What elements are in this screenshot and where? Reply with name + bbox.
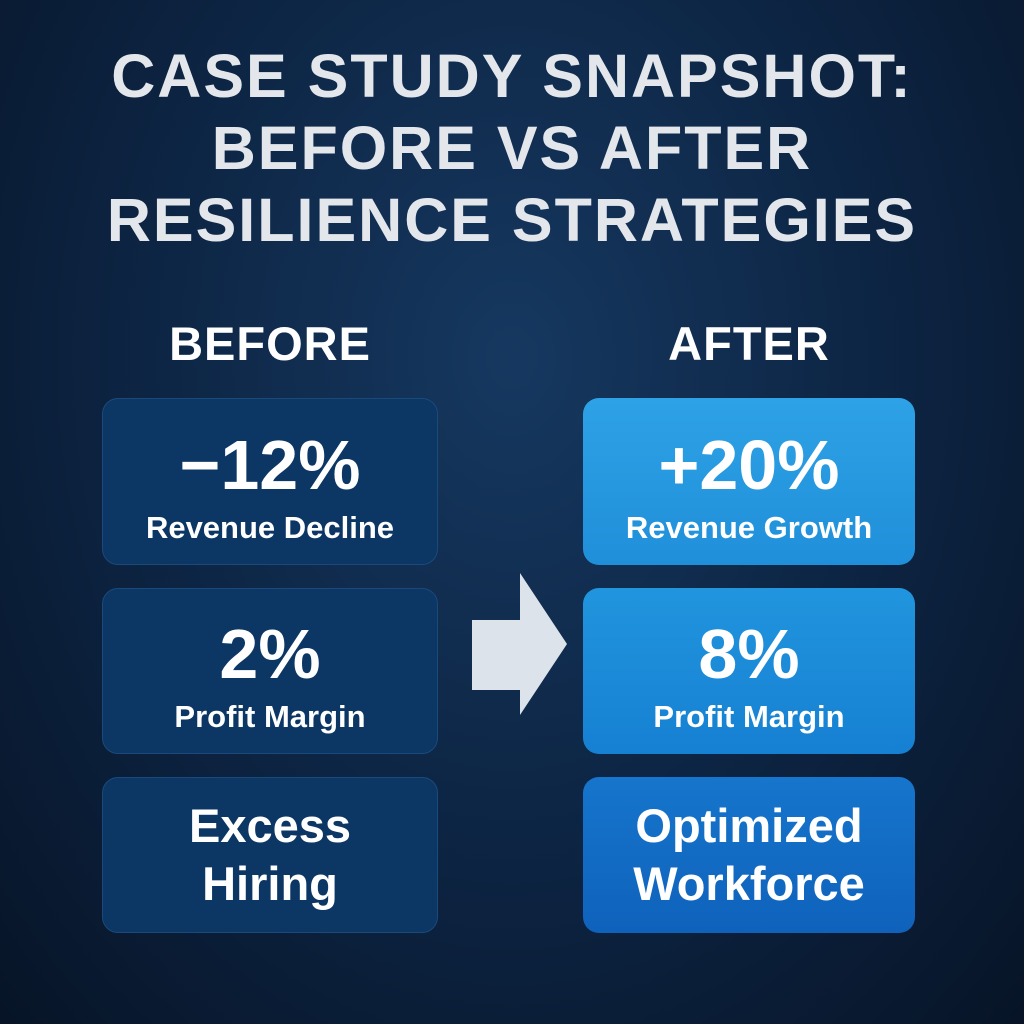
panel: before revenue: −12%: [180, 426, 360, 504]
panel: after workforce: Optimized: [635, 799, 863, 852]
panel: before profit: [102, 588, 438, 754]
panel: before profit: Profit Margin: [174, 699, 366, 734]
panel: after profit: 8%: [698, 615, 800, 693]
panel: before revenue: Revenue Decline: [146, 510, 394, 544]
panel: before profit: 2%: [219, 615, 321, 693]
title: BEFORE VS AFTER: [212, 114, 812, 182]
panel: after revenue: Revenue Growth: [626, 510, 872, 544]
panel: after revenue: +20%: [658, 426, 839, 504]
title: [107, 42, 917, 254]
panel: before hiring: Excess: [189, 799, 351, 852]
heading: before: BEFORE: [169, 317, 371, 370]
arrow: [472, 573, 567, 715]
panel: after revenue: [583, 398, 915, 565]
panel: before hiring: [102, 777, 438, 933]
panel: before revenue: [102, 398, 438, 565]
title: RESILIENCE STRATEGIES: [107, 186, 917, 254]
heading: after: AFTER: [668, 317, 830, 370]
panel: after profit: [583, 588, 915, 754]
panel: before hiring: Hiring: [202, 857, 338, 910]
title: CASE STUDY SNAPSHOT:: [111, 42, 913, 110]
panel: after workforce: Workforce: [633, 857, 865, 910]
panel: after profit: Profit Margin: [653, 699, 845, 734]
panel: after workforce: [583, 777, 915, 933]
